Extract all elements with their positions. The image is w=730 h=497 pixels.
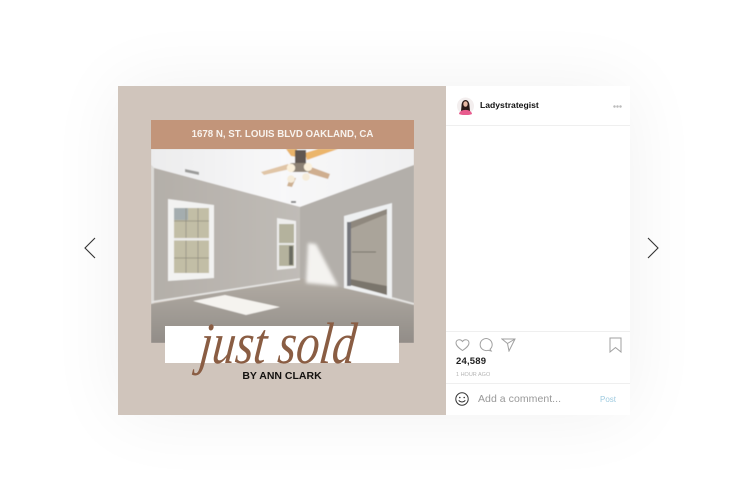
room photo [151, 149, 414, 343]
icon: bookmark [610, 338, 622, 353]
panel: sidebar [446, 86, 630, 415]
address banner: 1678 N, ST. LOUIS BLVD OAKLAND, CA [192, 129, 373, 140]
closet door [344, 203, 392, 299]
timestamp: 1 HOUR AGO [456, 372, 490, 378]
right wall [300, 165, 414, 305]
comment placeholder: Add a comment... [478, 393, 561, 405]
floor [151, 278, 414, 343]
white title band [165, 326, 399, 363]
left edge strip [151, 165, 154, 310]
icon: heart [456, 339, 470, 351]
icon: share [501, 338, 516, 352]
actions divider [446, 331, 630, 332]
left wall [154, 168, 300, 302]
fan [261, 149, 338, 187]
ceiling [151, 149, 414, 207]
instagram post card [118, 86, 630, 415]
left window [168, 199, 214, 281]
arrow: previous [84, 238, 96, 258]
header: profile [446, 86, 630, 126]
likes count: 24,589 [456, 356, 486, 367]
just sold script heading: just sold [191, 312, 360, 376]
arrow: next [648, 238, 659, 258]
icon: comment [480, 338, 493, 352]
middle window [277, 218, 296, 270]
byline: BY ANN CLARK [242, 370, 322, 382]
comment divider [446, 383, 630, 384]
avatar [457, 98, 474, 115]
more menu [613, 105, 622, 108]
floor sunlight [193, 295, 280, 315]
icon: smiley [455, 392, 469, 406]
username: Ladystrategist [480, 100, 539, 110]
ceiling vents [185, 169, 199, 175]
panel: post image [118, 86, 446, 415]
baseboards [152, 279, 300, 302]
sunlight on wall [306, 243, 338, 286]
address banner [151, 120, 414, 149]
post button: Post [600, 395, 616, 404]
